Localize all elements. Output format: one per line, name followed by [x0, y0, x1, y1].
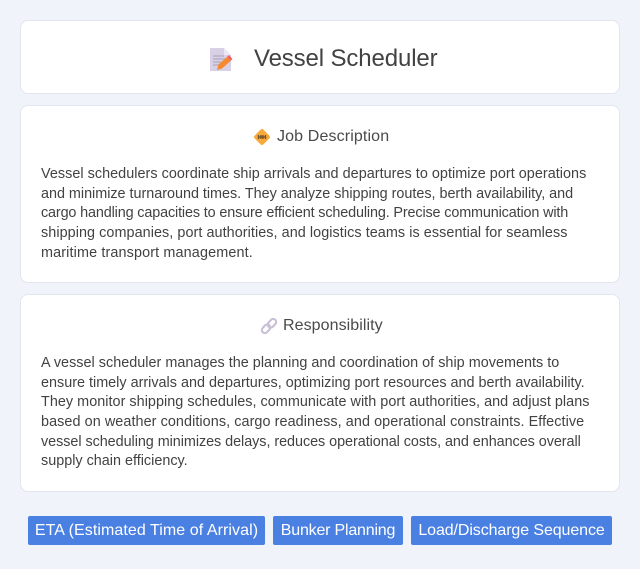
text block: job description: Vessel schedulers coordinate ship arrivals and departures to optimize port operations — [41, 166, 586, 182]
tag: ETA — [28, 516, 265, 545]
text block: job description — [41, 166, 586, 261]
text block: job description: cargo handling capacities to ensure efficient scheduling. Precise communication with — [41, 205, 568, 221]
heading: job description: Job Description — [277, 128, 389, 145]
title: Vessel Scheduler — [254, 45, 438, 72]
tag: load/discharge sequence: Load/Discharge Sequence — [418, 522, 605, 539]
tag: bunker planning: Bunker Planning — [281, 522, 395, 539]
icon: document with pencil — [210, 48, 232, 71]
panel: job description — [20, 105, 620, 283]
text block: responsibility — [41, 355, 589, 469]
tag: load/discharge sequence — [411, 516, 612, 545]
text block: job description: shipping companies, port authorities, and logistics teams is essential for seamless — [41, 225, 568, 241]
text block: responsibility: based on weather conditions, cargo readiness, and operational constraints. Effective — [41, 414, 584, 430]
text block: responsibility: A vessel scheduler manages the planning and coordination of ship movements to — [41, 355, 559, 371]
icon: orange diamond — [254, 129, 270, 145]
text block: job description: and minimize turnaround times. They analyze shipping routes, berth availability, and — [41, 186, 573, 202]
text block: responsibility: vessel scheduling minimizes delays, reduces operational costs, and enhances overall — [41, 434, 581, 450]
panel: title header — [20, 20, 620, 94]
heading: responsibility: Responsibility — [283, 317, 383, 334]
text block: responsibility: ensure timely arrivals and departures, optimizing port resources and berth availability. — [41, 375, 585, 391]
text block: responsibility: They monitor shipping schedules, communicate with port authorities, and adjust plans — [41, 394, 589, 410]
panel: responsibility — [20, 294, 620, 492]
text block: responsibility: supply chain efficiency. — [41, 453, 188, 469]
tag: bunker planning — [273, 516, 403, 545]
icon: chain link — [260, 318, 278, 334]
text block: job description: maritime transport management. — [41, 245, 253, 261]
tag: ETA: ETA (Estimated Time of Arrival) — [35, 522, 258, 539]
